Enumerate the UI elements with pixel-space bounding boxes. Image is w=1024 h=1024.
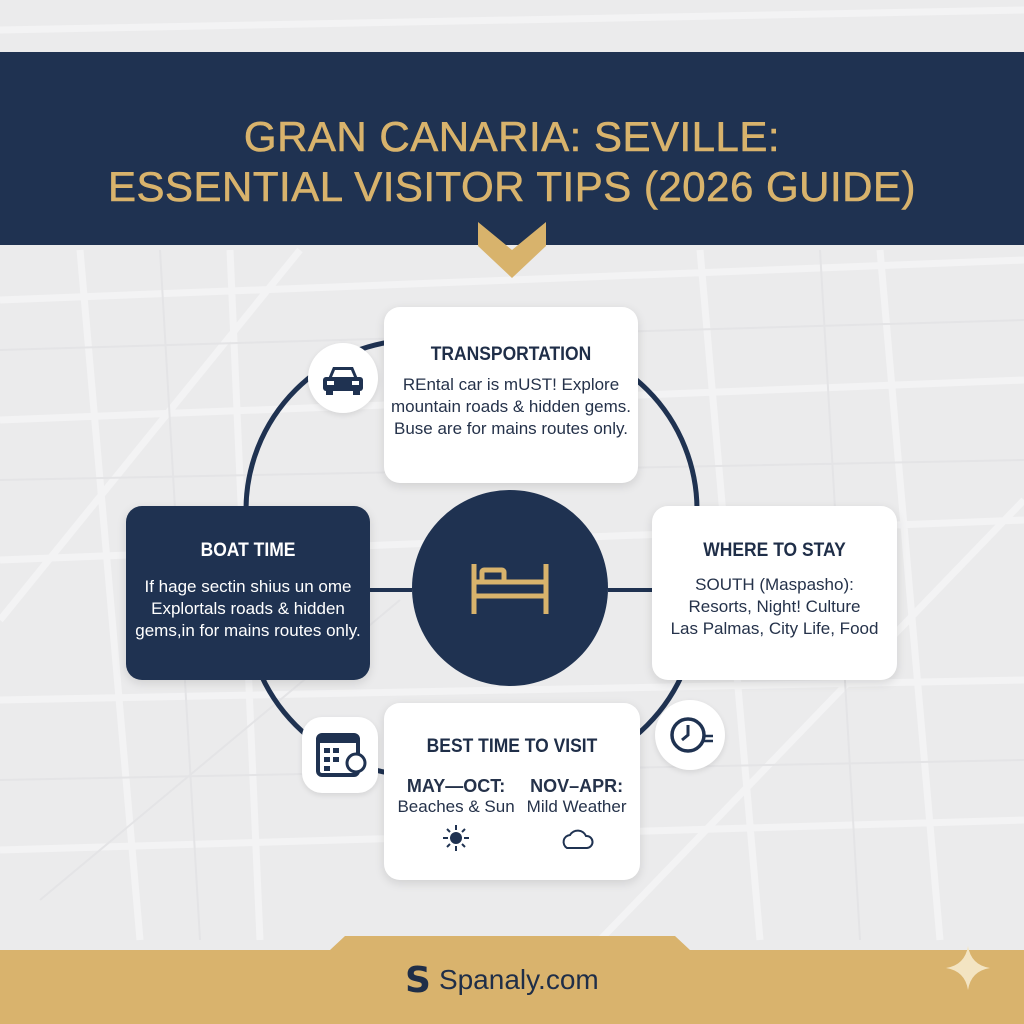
text: seasons: NOV–APR: [530,776,623,796]
text: transportation: mountain roads & hidden gems. [391,397,631,416]
text: seasons: Mild Weather [527,797,627,816]
text: where to stay: Las Palmas, City Life, Food [671,619,878,638]
text: transportation: Buse are for mains routes only. [394,419,628,438]
heading: best time: BEST TIME TO VISIT [427,736,597,757]
icon: calendar [302,717,378,793]
heading: where to stay: WHERE TO STAY [703,540,846,561]
title: ESSENTIAL VISITOR TIPS (2026 GUIDE) [108,163,916,210]
text: seasons [397,776,627,851]
footer bar [0,936,1024,1024]
footer logo: Spanaly.com [439,964,599,995]
icon: bed center circle [412,490,608,686]
text: boat time: If hage sectin shius un ome [145,577,351,596]
text: boat time: Explortals roads & hidden [151,599,345,618]
text: seasons: Beaches & Sun [397,797,515,816]
icon: car [308,343,378,413]
text: boat time: gems,in for mains routes only. [135,621,361,640]
text: boat time [135,577,361,640]
header banner [0,52,1024,245]
title [108,113,916,210]
text: transportation [391,375,631,438]
panel: where to stay [652,506,897,680]
panel: boat time [126,506,370,680]
heading: transportation: TRANSPORTATION [431,344,591,365]
chevron arrow [478,222,546,278]
text: where to stay: SOUTH (Maspasho): [695,575,854,594]
text: where to stay: Resorts, Night! Culture [689,597,860,616]
panel: best time to visit [384,703,640,880]
panel: transportation [384,307,638,483]
text: seasons: MAY—OCT: [407,776,505,796]
icon: clock [655,700,725,770]
text: where to stay [671,575,878,638]
footer logo: S [405,960,431,1000]
title: GRAN CANARIA: SEVILLE: [244,113,780,160]
text: transportation: REntal car is mUST! Explore [403,375,619,394]
footer logo [405,960,599,1000]
icon: sparkle [946,946,990,990]
heading: boat time: BOAT TIME [201,540,295,561]
